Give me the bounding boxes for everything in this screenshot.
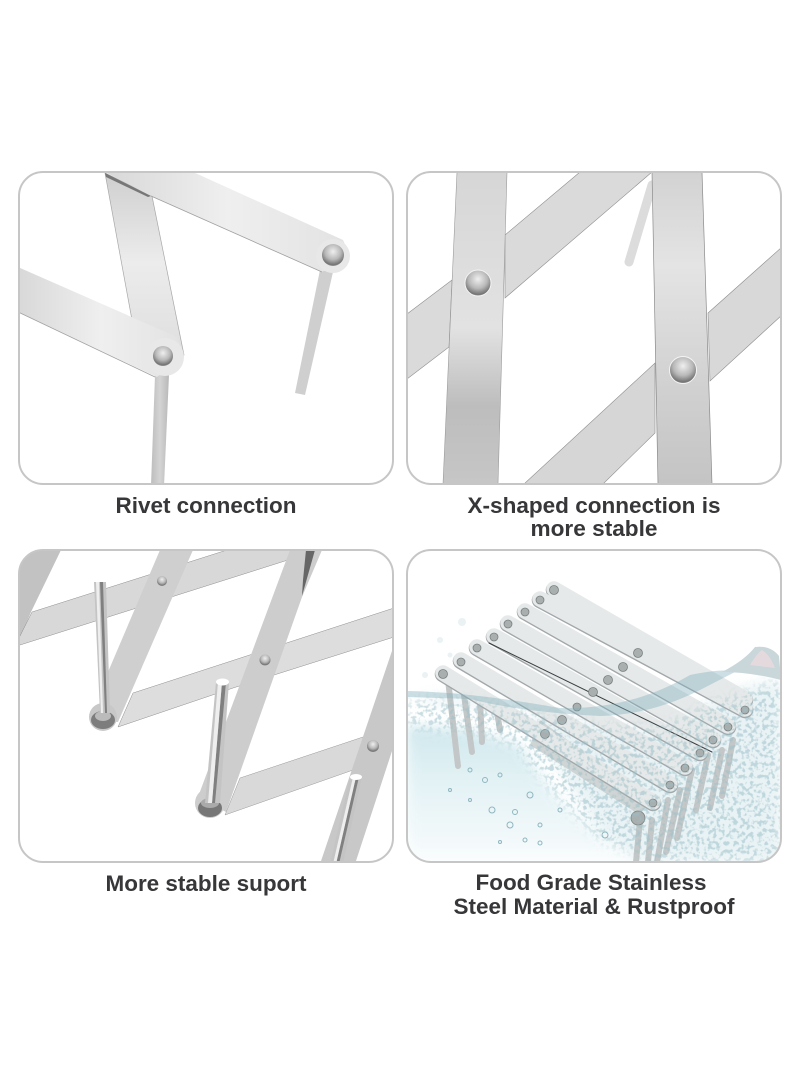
strap dark edge xyxy=(489,643,712,752)
water body xyxy=(407,680,781,862)
pin: left xyxy=(151,375,169,486)
caption: more stable support: More stable suport xyxy=(106,871,307,896)
strap: centre diagonal xyxy=(105,173,184,372)
icon: rivet right xyxy=(670,356,696,384)
rack straps and pins xyxy=(15,550,394,864)
panel: x-shaped connection xyxy=(407,172,782,484)
caption: food grade steel xyxy=(454,870,735,919)
pin left xyxy=(94,582,110,713)
panel: rivet connection xyxy=(20,173,350,483)
strap: left scissor xyxy=(89,550,193,731)
caption: food grade steel: Food Grade Stainless xyxy=(476,870,706,895)
pin base left xyxy=(91,711,115,729)
caption: food grade steel: Steel Material & Rustproof xyxy=(454,894,735,919)
icon: small rivet three xyxy=(367,740,379,752)
panel: food grade steel in water xyxy=(408,581,780,861)
icon: small rivet one xyxy=(157,576,167,586)
strap: right scissor xyxy=(320,645,394,864)
rack legs xyxy=(448,680,733,862)
strap: top arm xyxy=(105,172,350,273)
cross band: lower xyxy=(225,736,366,815)
vertical strap: left xyxy=(443,172,507,484)
underside strap xyxy=(530,720,650,815)
rack straps xyxy=(443,589,750,803)
pin: right xyxy=(295,270,333,395)
water foam band xyxy=(407,670,781,862)
back strap fill xyxy=(560,590,750,720)
icon: rivet left xyxy=(153,346,173,366)
strap: left arm xyxy=(18,267,184,377)
caption: x-shaped connection xyxy=(468,493,720,541)
water surface and wave crest xyxy=(407,647,781,716)
panel: stable support xyxy=(15,550,394,864)
pin base centre xyxy=(198,798,222,817)
icon: rivet right xyxy=(322,244,344,266)
cross band: middle xyxy=(118,608,394,727)
cross band: upper xyxy=(18,550,292,645)
diagonal strap: far right xyxy=(708,247,782,381)
rack arms and pins xyxy=(18,172,350,486)
strap: centre scissor xyxy=(195,550,322,818)
diagonal strap: far left xyxy=(407,280,452,379)
caption: x-shaped connection: X-shaped connection is xyxy=(468,493,720,518)
bubbles xyxy=(448,768,608,845)
rack straps xyxy=(407,172,782,484)
corner strap xyxy=(20,551,60,636)
rivets xyxy=(438,586,749,825)
vertical strap: right xyxy=(652,172,712,484)
icon: small rivet two xyxy=(260,654,270,666)
pin right xyxy=(334,774,362,861)
caption: rivet connection: Rivet connection xyxy=(116,493,296,518)
faint upper splash xyxy=(422,618,466,678)
pin behind strap xyxy=(629,185,652,262)
panel outlines xyxy=(19,172,781,862)
diagonal strap: lower xyxy=(524,363,655,484)
icon: rivet left xyxy=(465,270,491,296)
diagonal strap: upper xyxy=(505,172,652,298)
caption: x-shaped connection: more stable xyxy=(530,516,658,541)
pin centre xyxy=(205,678,229,803)
